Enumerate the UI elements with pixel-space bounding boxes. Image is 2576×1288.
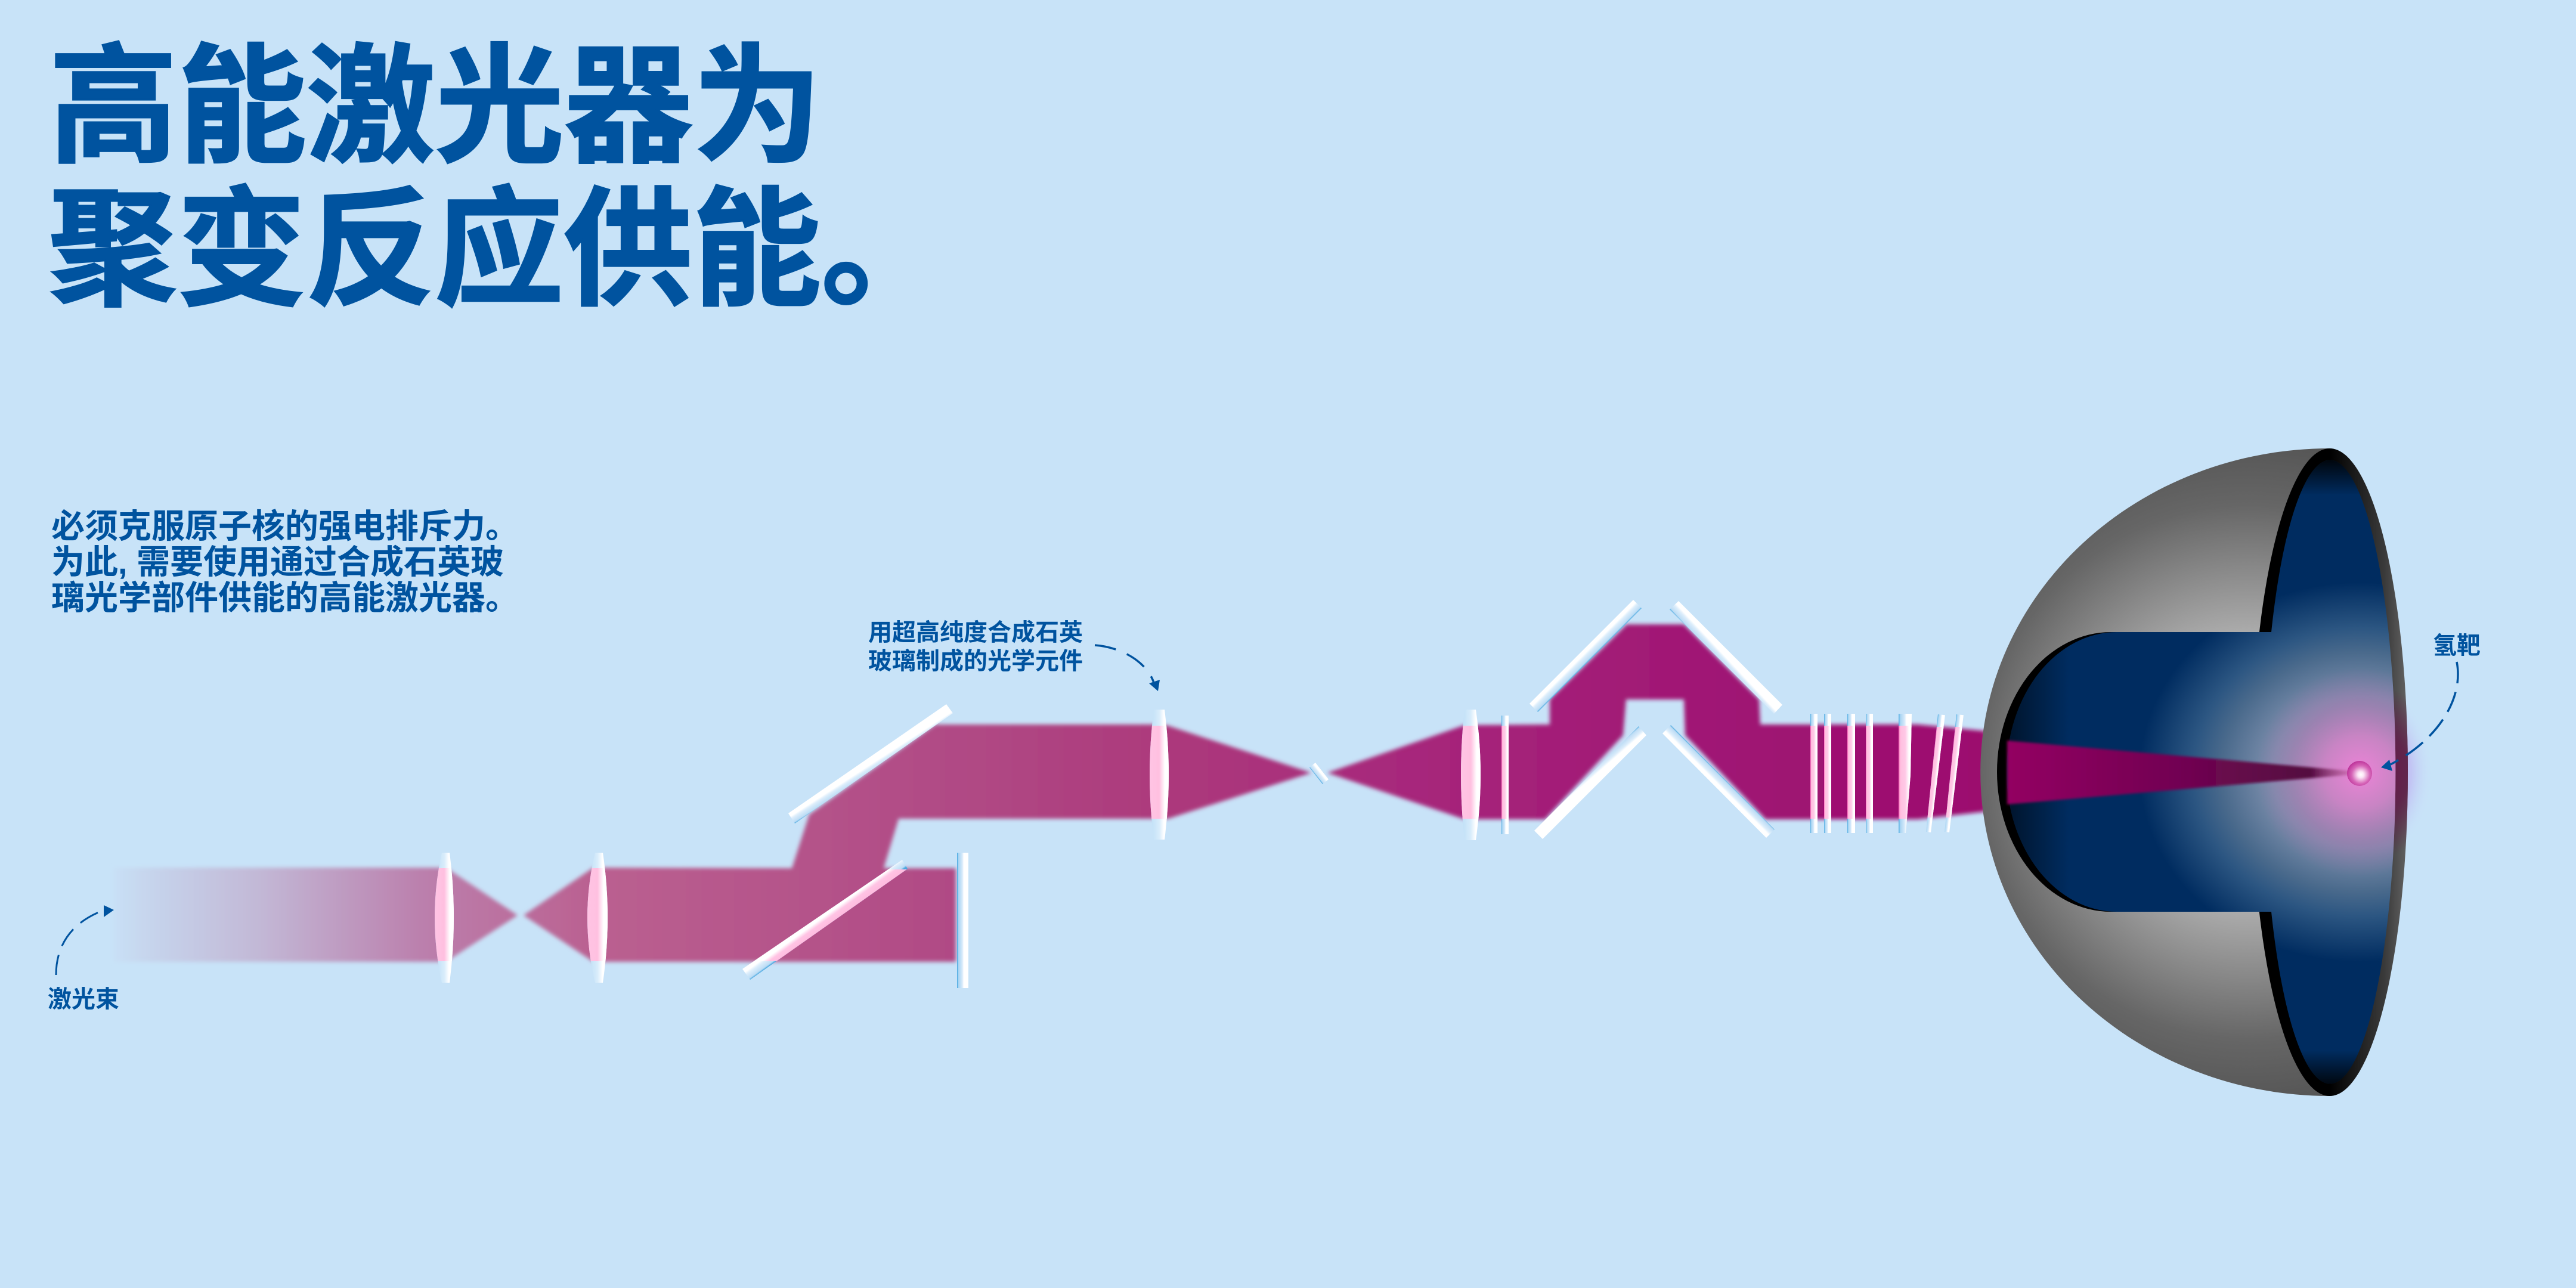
cutaway lining — [1997, 632, 2284, 912]
outer glow — [2287, 678, 2433, 866]
title — [48, 35, 950, 322]
end plate — [957, 853, 968, 988]
split mirror — [742, 860, 908, 980]
small pinhole mirror — [1309, 763, 1329, 784]
title: 聚变反应供能。 — [48, 178, 950, 322]
dome shell — [1980, 448, 2330, 1096]
lens 3 — [1150, 710, 1169, 840]
plate 1 — [1501, 716, 1509, 834]
inner beam — [2007, 741, 2352, 804]
optics label — [868, 620, 1160, 691]
interior shading — [2007, 460, 2396, 1084]
optics label: 用超高纯度合成石英 — [868, 620, 1083, 646]
title: 高能激光器为 — [49, 35, 822, 179]
upper turning mirror — [788, 704, 953, 823]
intro text block: 璃光学部件供能的高能激光器。 — [51, 579, 519, 617]
target label: 氢靶 — [2433, 633, 2481, 659]
intro text block — [51, 507, 519, 617]
chamber hemisphere — [1980, 448, 2408, 1096]
lens 4 — [1461, 710, 1481, 840]
hydrogen target — [2347, 761, 2372, 786]
laser beam path — [113, 624, 1986, 962]
optics label: 玻璃制成的光学元件 — [868, 648, 1083, 674]
intro text block: 必须克服原子核的强电排斥力。 — [51, 507, 519, 545]
intro text block: 为此, 需要使用通过合成石英玻 — [51, 543, 504, 581]
slanted plates — [1925, 714, 1964, 832]
laser beam label: 激光束 — [48, 986, 119, 1013]
lens 1 — [435, 853, 454, 983]
lens 2 — [587, 853, 608, 983]
optical plates — [1810, 714, 1912, 833]
laser beam label — [48, 905, 119, 1013]
rim ring — [2252, 448, 2408, 1096]
laser beam arrow — [56, 905, 114, 975]
optics arrow — [1095, 645, 1160, 691]
target arrow — [2381, 662, 2458, 771]
chamber interior — [2007, 460, 2395, 1083]
target label — [2381, 633, 2481, 771]
rim glow — [2252, 448, 2408, 1096]
angled mirrors — [1530, 600, 1782, 839]
